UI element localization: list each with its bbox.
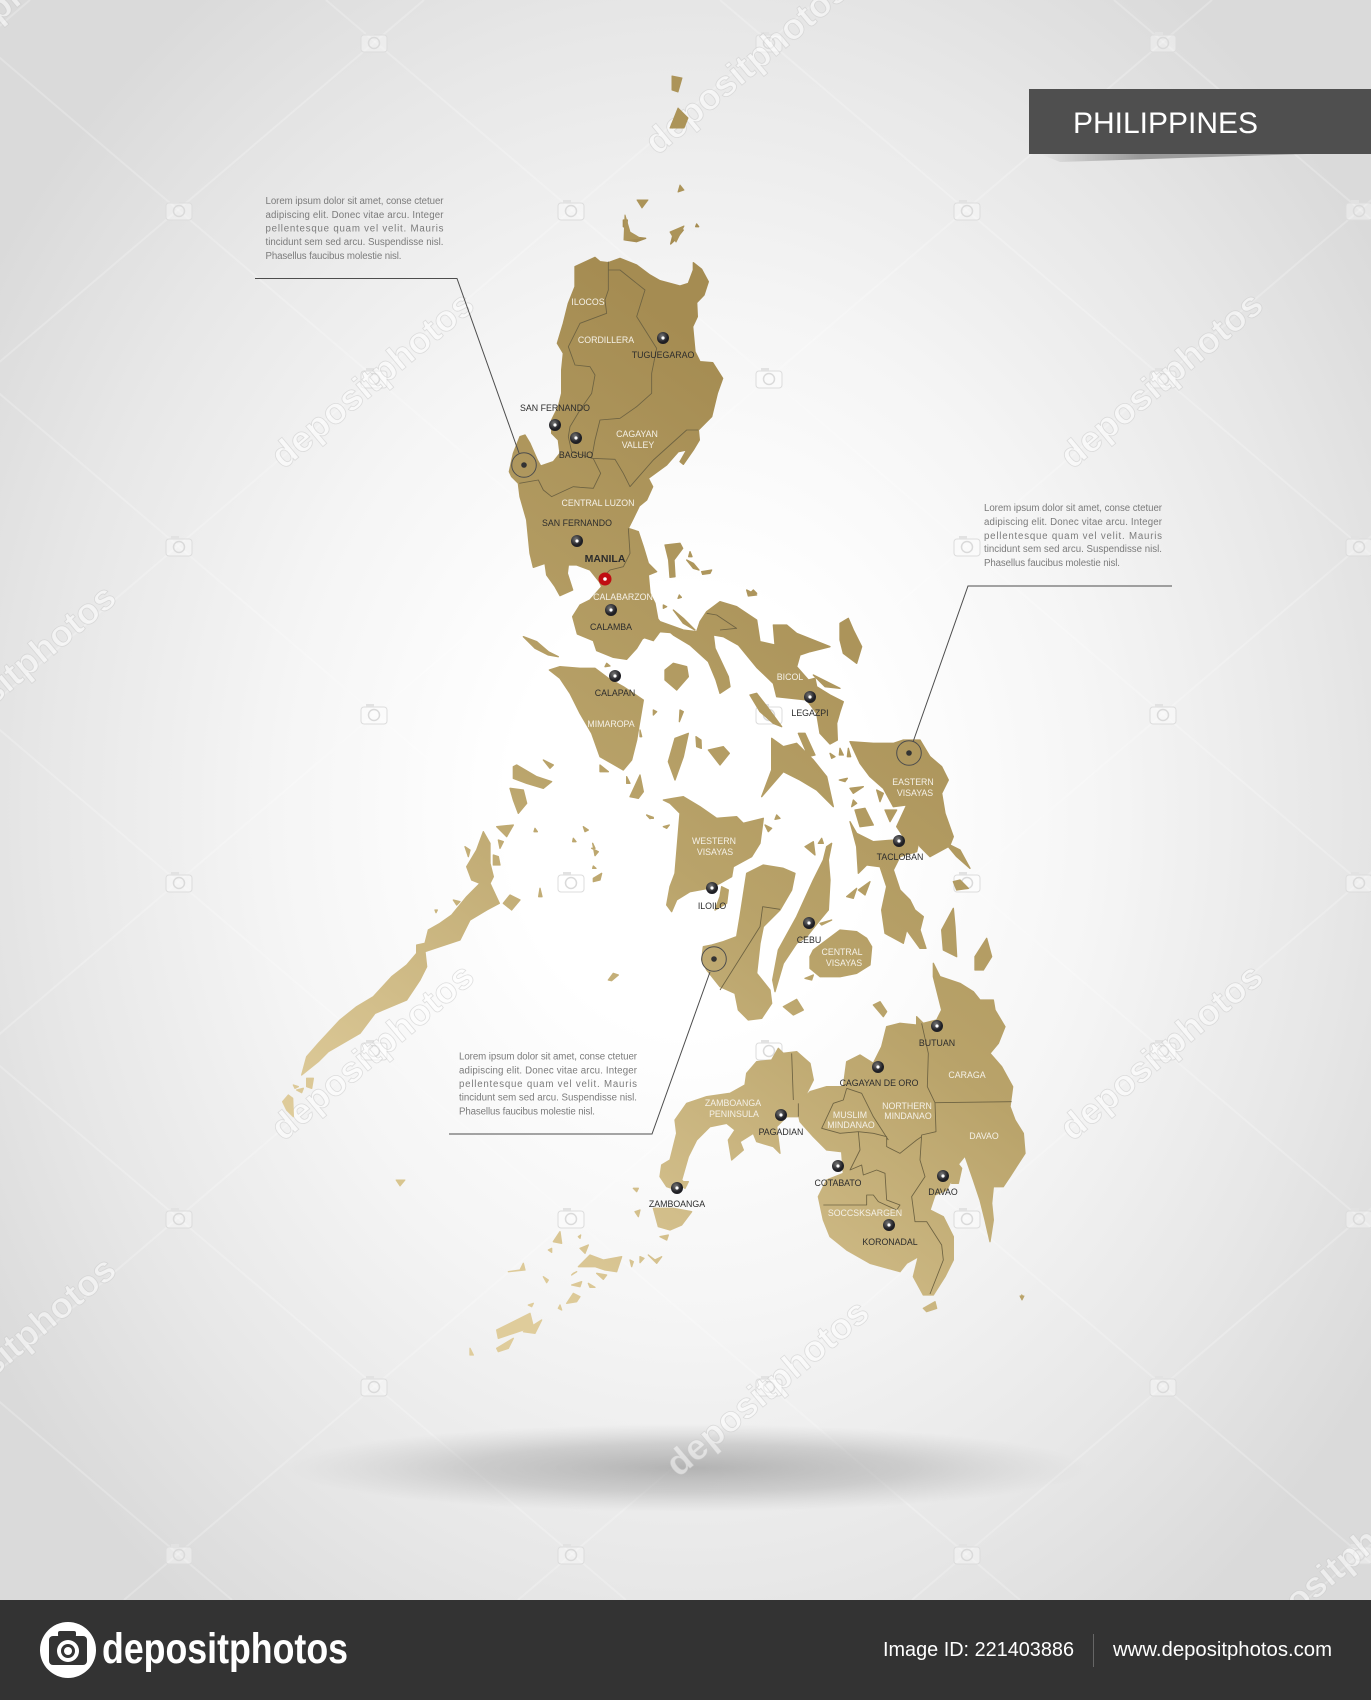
region: Negros [702,865,795,1020]
region and city labels: TUGUEGARAO [632,350,694,360]
region: Bicol and Quezon [640,590,992,1020]
footer bar [0,1600,1371,1700]
region and city labels: BAGUIO [559,450,593,460]
region and city labels: CALAPAN [595,688,635,698]
region and city labels: TACLOBAN [877,852,923,862]
callout 3 text: adipiscing elit. Donec vitae arcu. Integer [459,1066,638,1076]
region and city labels: PENINSULA [709,1109,759,1119]
watermark: depositphotos text: depositphotos [1051,955,1271,1148]
region and city labels: VISAYAS [897,788,933,798]
region: Mindanao [660,963,1025,1312]
map ground shadow [288,1424,1088,1512]
region: Western Visayas [663,797,763,912]
region and city labels: BICOL [777,672,803,682]
islands: Catanduanes, Marinduque, Masbate [640,590,883,807]
region: Central Visayas [783,930,887,1017]
image id: Image ID: 221403886 [883,1638,1074,1661]
region and city labels: MINDANAO [827,1120,875,1130]
region: Eastern Visayas [850,740,970,868]
region and city labels: LEGAZPI [791,708,829,718]
logo wordmark: depositphotos [102,1625,348,1673]
callout 1 text: Lorem ipsum dolor sit amet, conse ctetuer [266,196,444,207]
region: Sulu archipelago [470,1182,692,1355]
region and city labels: SAN FERNANDO [520,403,590,413]
region and city labels: VALLEY [622,440,654,450]
region and city labels: CARAGA [948,1070,986,1080]
callout 2 text: tincidunt sem sed arcu. Suspendisse nisl. [984,544,1162,555]
region and city labels: CAGAYAN [616,429,658,439]
title banner: PHILIPPINES [1073,107,1258,140]
region and city labels: MANILA [585,553,626,565]
region and city labels: CENTRAL LUZON [562,498,634,508]
region and city labels: SOCCSKSARGEN [828,1208,902,1218]
region and city labels: EASTERN [892,777,934,787]
region and city labels: ILOCOS [571,297,605,307]
callout 3 text: Lorem ipsum dolor sit amet, conse ctetuer [459,1052,638,1062]
region and city labels: MUSLIM [833,1110,867,1120]
callout 3 text: pellentesque quam vel velit. Mauris [459,1079,637,1090]
region and city labels: CORDILLERA [578,335,634,345]
region and city labels: NORTHERN [882,1101,932,1111]
watermark: depositphotos text: depositphotos [262,955,482,1148]
region and city labels: KORONADAL [862,1237,918,1247]
region and city labels: VISAYAS [697,847,733,857]
region and city labels: COTABATO [815,1178,862,1188]
callout 3 text: Phasellus faucibus molestie nisl. [459,1106,595,1118]
region and city labels: PAGADIAN [759,1127,803,1137]
callout 1 text: pellentesque quam vel velit. Mauris [266,224,444,234]
callout 2 text [984,503,1163,569]
callout 3 text: tincidunt sem sed arcu. Suspendisse nisl. [459,1092,637,1104]
region: Zamboanga Peninsula [660,1048,813,1190]
callout 2 text: Lorem ipsum dolor sit amet, conse ctetuer [984,503,1163,514]
islands: Batanes and small northern isles [396,76,1024,1300]
region and city labels: CEBU [797,935,821,945]
region and city labels: DAVAO [969,1131,999,1141]
callout 1 text [266,196,444,262]
watermark: depositphotos text: depositphotos [1051,283,1271,476]
region and city labels: CENTRAL [821,947,863,957]
region and city labels: ILOILO [698,901,726,911]
title banner [1029,89,1371,162]
callout 1 text: tincidunt sem sed arcu. Suspendisse nisl. [266,237,444,248]
callout 3: south leader line and marker [449,947,726,1134]
callout 1: north-west leader line and marker [255,278,536,477]
region: Mindoro [549,667,643,770]
icon: depositphotos camera logo [40,1622,96,1678]
region and city labels [520,297,999,1247]
callout 2 text: adipiscing elit. Donec vitae arcu. Integer [984,517,1163,528]
region and city labels: WESTERN [692,836,736,846]
callout 2 text: pellentesque quam vel velit. Mauris [984,531,1162,542]
city pins [549,332,949,1231]
region and city labels: MINDANAO [884,1111,932,1121]
callout 1 text: Phasellus faucibus molestie nisl. [266,251,402,262]
region and city labels: VISAYAS [826,958,862,968]
website: www.depositphotos.com [1112,1638,1332,1661]
region and city labels: SAN FERNANDO [542,518,612,528]
region and city labels: CALABARZON [593,592,653,602]
callout 1 text: adipiscing elit. Donec vitae arcu. Integer [266,210,444,221]
watermark: depositphotos text: depositphotos [262,283,482,476]
map of the Philippines [283,76,1025,1355]
watermark: depositphotos text: depositphotos [657,1291,877,1484]
region and city labels: ZAMBOANGA [705,1098,761,1108]
region and city labels: ZAMBOANGA [649,1199,705,1209]
region: Palawan [283,760,653,1117]
region and city labels: DAVAO [928,1187,958,1197]
region and city labels: MIMAROPA [587,719,635,729]
region and city labels: BUTUAN [919,1038,955,1048]
region: Cebu [773,843,832,992]
region and city labels: CALAMBA [590,622,632,632]
region and city labels: CAGAYAN DE ORO [840,1078,919,1088]
callout 2 text: Phasellus faucibus molestie nisl. [984,558,1120,569]
region: Luzon [509,220,757,770]
capital pin: Manila [598,572,612,586]
callout 3 text [459,1052,638,1118]
callout 2: east leader line and marker [897,586,1172,765]
